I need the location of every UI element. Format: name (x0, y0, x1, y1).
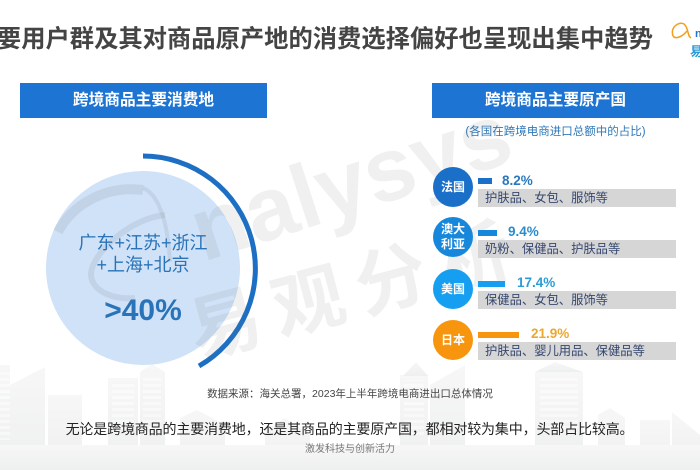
label: USA: 保健品、女包、服饰等 (485, 293, 608, 307)
right heading: 跨境商品主要原产国 (485, 92, 626, 109)
circle label: regions (78, 233, 208, 275)
icon: France: 法国 (441, 180, 465, 194)
left heading: 跨境商品主要消费地 (73, 92, 214, 109)
watermark text: 易观分析 (180, 207, 533, 373)
subtitle: (各国在跨境电商进口总额中的占比) (465, 126, 646, 138)
icon: USA (433, 269, 473, 309)
icon: France (433, 167, 473, 207)
value: Japan: 21.9% (531, 326, 569, 341)
right heading (432, 83, 679, 118)
footer slogan: 激发科技与创新活力 (305, 444, 395, 455)
circle label: regions: +上海+北京 (96, 255, 190, 275)
value: USA: 17.4% (517, 275, 555, 290)
chart: consumption circle (46, 154, 258, 368)
source note: 数据来源：海关总署，2023年上半年跨境电商进出口总体情况 (207, 388, 493, 400)
left heading (20, 83, 267, 118)
value: France: 8.2% (502, 173, 533, 188)
label: Japan: 护肤品、婴儿用品、保健品等 (485, 344, 645, 358)
icon: Japan: 日本 (441, 332, 465, 346)
conclusion: 无论是跨境商品的主要消费地，还是其商品的主要原产国，都相对较为集中，头部占比较高。 (66, 421, 633, 437)
bar: USA (478, 281, 505, 287)
label: France: 护肤品、女包、服饰等 (485, 191, 608, 205)
bar: France (478, 178, 492, 184)
label: Japan (478, 342, 676, 360)
arc (143, 156, 255, 366)
circle value: >40% (104, 294, 182, 327)
watermark text: nalysys (178, 84, 523, 281)
logo (672, 22, 700, 59)
icon: Australia: 利亚 (441, 237, 465, 251)
icon: Australia: 澳大 (441, 222, 465, 236)
label: France (478, 189, 676, 207)
label: USA (478, 291, 676, 309)
circle label: regions: 广东+江苏+浙江 (78, 233, 208, 253)
bar: Australia (478, 230, 497, 236)
circle fill (46, 171, 240, 365)
label: Australia: 奶粉、保健品、护肤品等 (485, 242, 620, 256)
icon: Australia (433, 217, 473, 257)
value: Australia: 9.4% (508, 224, 539, 239)
watermark logo (58, 188, 170, 298)
icon: Japan (433, 320, 473, 360)
watermark text (178, 84, 533, 373)
bar: Japan (478, 332, 519, 338)
label: Australia (478, 240, 676, 258)
icon: USA: 美国 (441, 282, 465, 296)
logo mark (672, 22, 700, 40)
